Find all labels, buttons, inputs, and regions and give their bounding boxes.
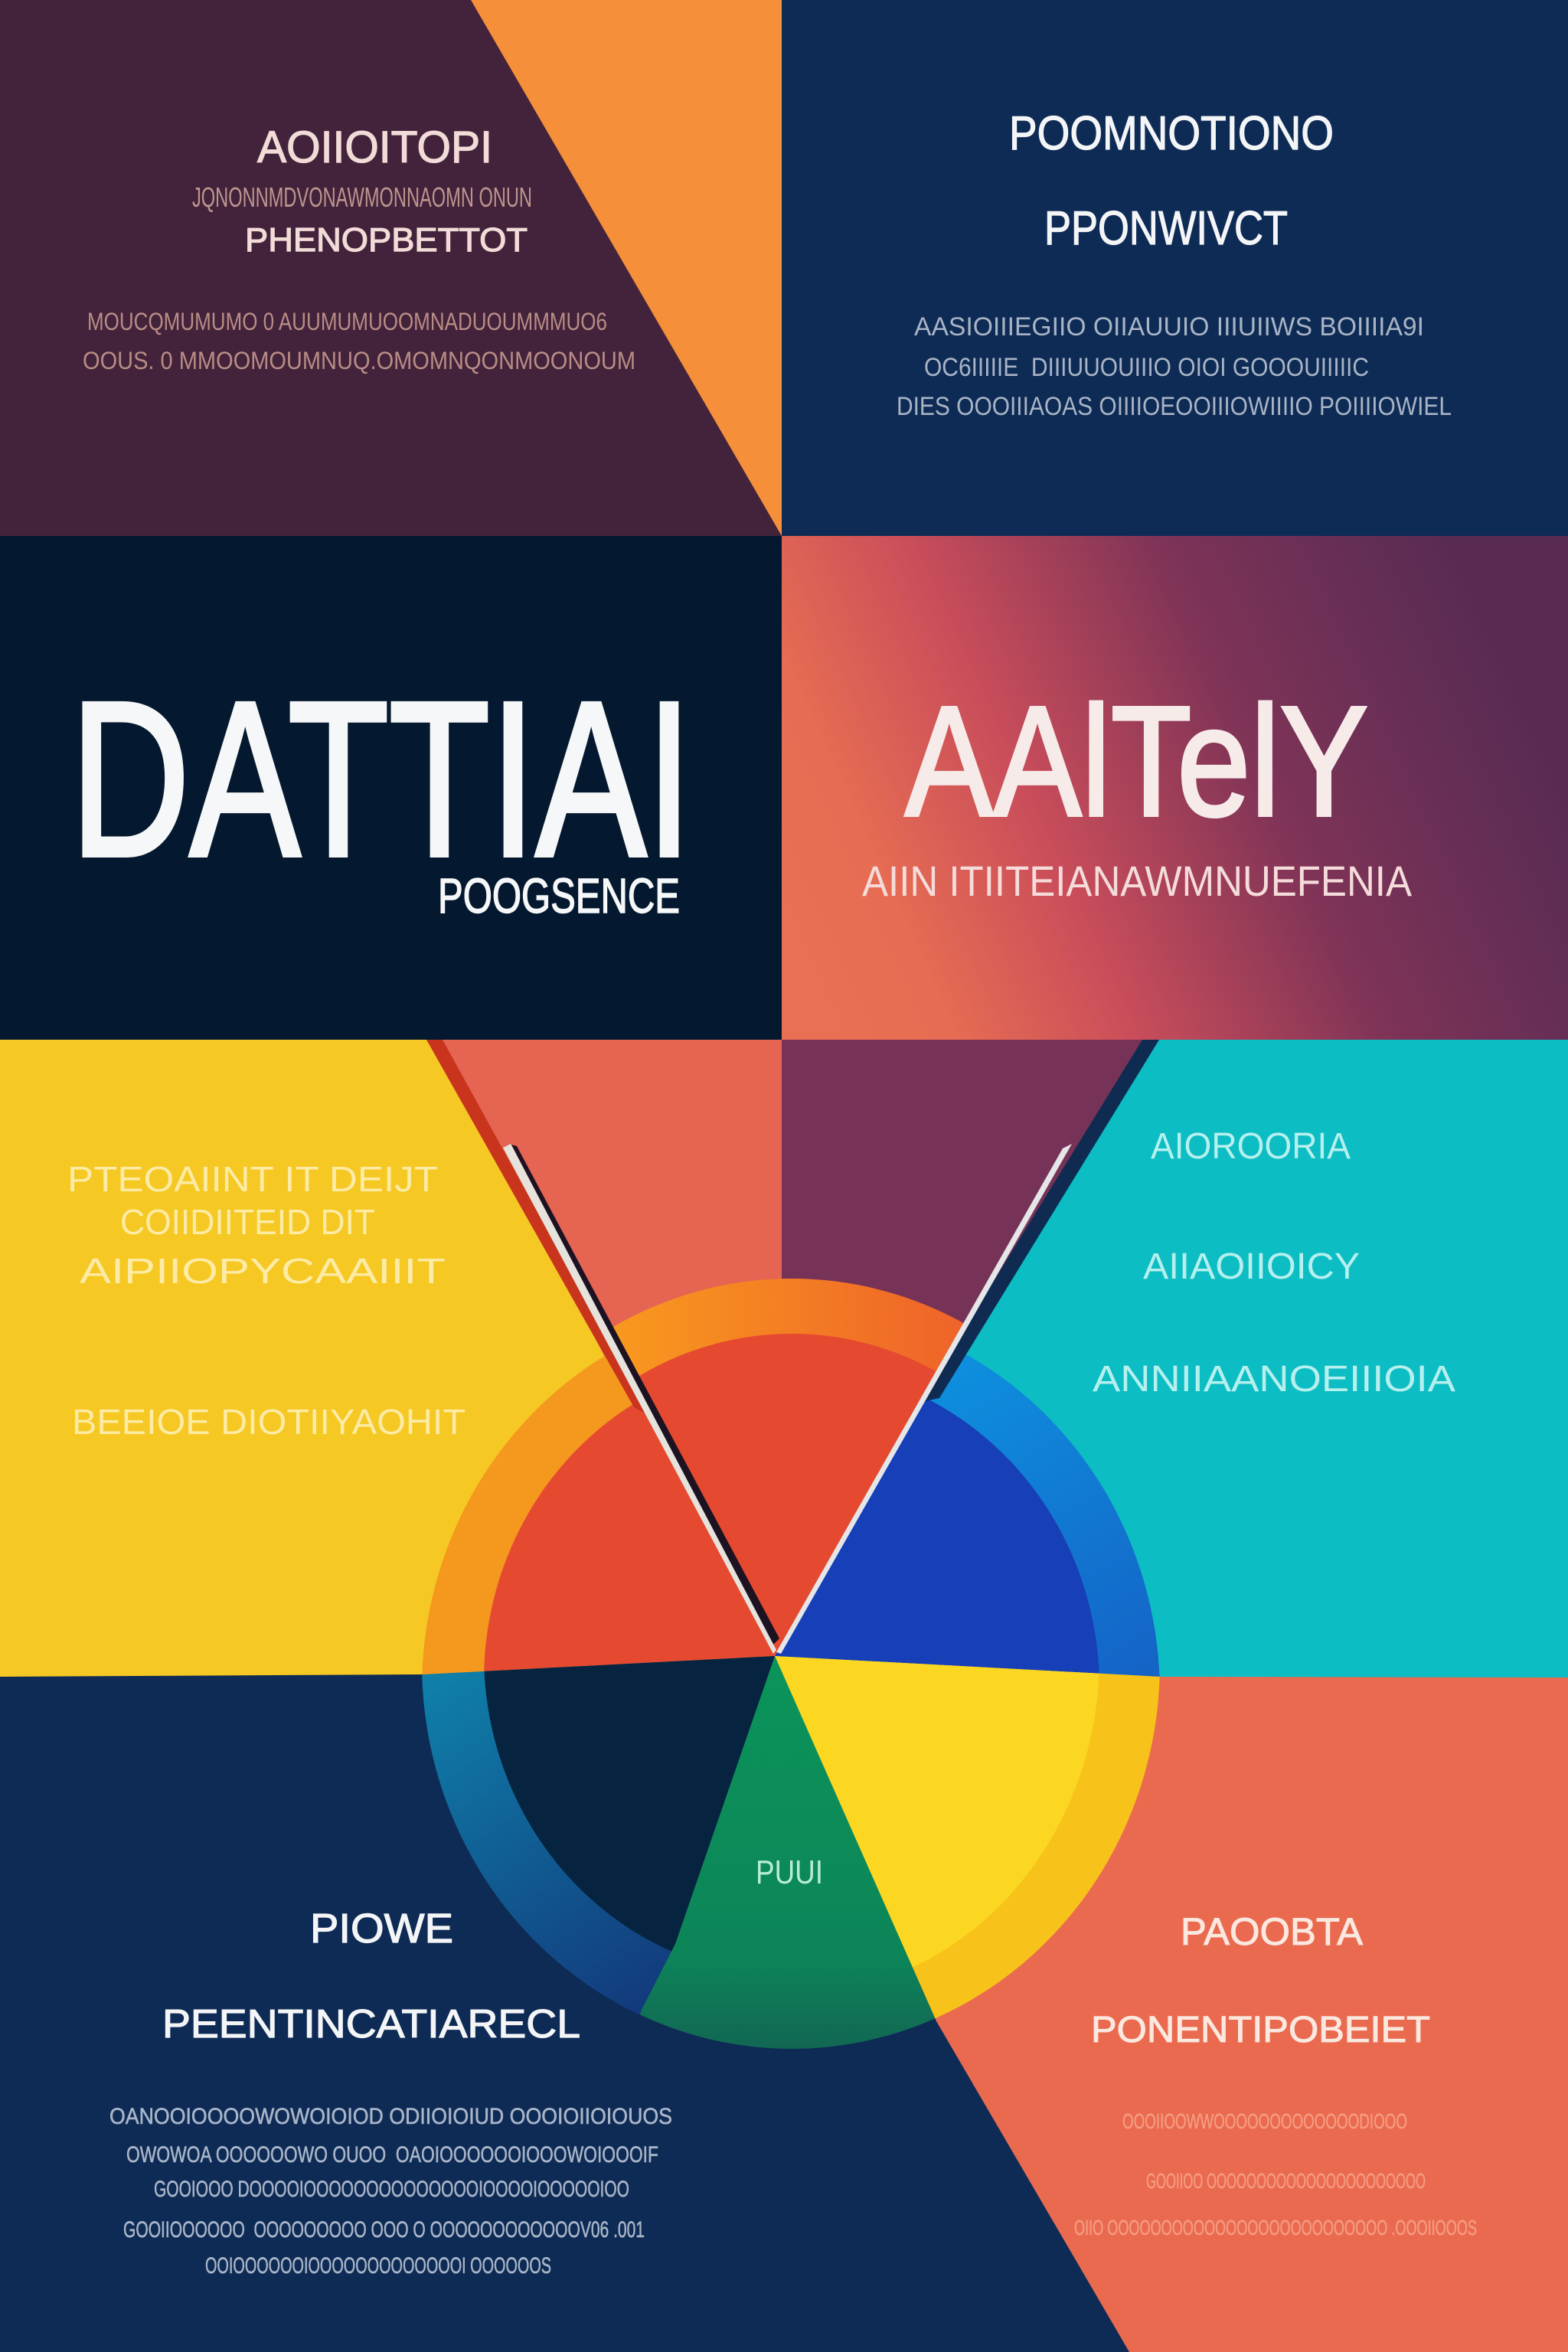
text: bottom left body: OANOOIOOOOWOWOIOIOD ODIIOIOIUD OOOIOIIOIOUOS [109,2104,672,2129]
panel: gradient hero [782,536,1568,1040]
text: teal panel: ANNIIAANOEIIIOIA [1093,1359,1455,1400]
heading: top left: AOIIOITOPI [257,122,492,172]
segment: dark navy [422,1656,775,2016]
heading: top right: PPONWIVCT [1044,202,1288,255]
text: top right body: OC6IIIIIE DIIIUUOUIIIO OIOI GOOOUIIIIIC [924,353,1369,382]
heading: top left: PHENOPBETTOT [245,221,528,259]
panel: bottom left navy [0,1656,1129,2352]
label: green segment: PUUI [756,1854,823,1891]
subtitle: POOGSENCE [438,868,680,923]
panel text: bottom left [109,1906,672,2278]
text: yellow panel: BEEIOE DIOTIIYAOHIT [72,1402,466,1442]
purple background wedge [782,1040,1148,1608]
coral background wedge [440,1040,782,1608]
panel: bottom right coral [775,1656,1568,2352]
panel: title dark navy [0,536,782,1040]
segment: top red [613,1279,963,1655]
text: yellow panel: AIPIIOPYCAAIIIT [80,1251,446,1291]
text: yellow panel: COIIDIITEID DIT [120,1202,375,1242]
orange diagonal wedge [471,0,782,536]
text: teal panel [1093,1126,1455,1400]
text: bottom left body: OOIOOOOOOIOOOOOOOOOOOOOI OOOOOOS [205,2253,551,2278]
panel: yellow left [0,1040,782,1677]
heading: bottom left: PEENTINCATIARECL [162,2002,580,2047]
segment: right blue [775,1354,1159,1677]
heading: top right [1009,107,1334,255]
heading: top right: POOMNOTIONO [1009,107,1334,160]
right pointer stripe [776,1040,1159,1654]
heading: bottom right: PAOOBTA [1181,1910,1364,1953]
text: bottom left body: GOOIIOOOOOO OOOOOOOOO OOO O OOOOOOOOOOOOV06 .001 [123,2217,645,2243]
panel text: bottom right [1074,1910,1477,2239]
text: bottom left body: GOOIOOO DOOOOIOOOOOOOOOOOOOOIOOOOIOOOOOIOO [154,2177,629,2202]
heading: bottom right [1091,1910,1430,2050]
text: bottom left body: OWOWOA OOOOOOWO OUOO OAOIOOOOOOIOOOWOIOOOIF [126,2142,658,2167]
panel: teal right [782,1040,1568,1677]
heading: bottom left [162,1906,580,2047]
segment: yellow [775,1656,1160,2018]
text: yellow panel: PTEOAIINT IT DEIJT [67,1159,438,1199]
hero subtitle: AIIN ITIITEIANAWMNUEFENIA [862,857,1413,905]
text: top left subheading: JQNONNMDVONAWMONNAOMN ONUN [192,181,532,213]
text: teal panel: AIOROORIA [1151,1126,1351,1167]
main title: DATTIAI [70,656,692,903]
hero title: AAlTelY [905,674,1368,849]
segment: left red [422,1356,775,1675]
text: teal panel: AIIAOIIOICY [1143,1246,1360,1287]
left pointer stripe [426,1040,779,1654]
text: top right body: AASIOIIIEGIIO OIIAUUIO IIIUIIWS BOIIIIA9I [914,312,1424,341]
heading: bottom right: PONENTIPOBEIET [1091,2010,1430,2050]
heading: bottom left: PIOWE [310,1906,453,1952]
text: bottom right body [1074,2109,1477,2239]
text: top left body [83,308,635,374]
text: top right body [897,312,1452,421]
text: top left body: MOUCQMUMUMO 0 AUUMUMUOOMNADUOUMMMUO6 [87,308,607,335]
text: top left body: OOUS. 0 MMOOMOUMNUQ.OMOMNQONMOONOUM [83,347,635,374]
text: bottom right body: OOOIIOOWWOOOOOOOOOOOOODIOOO [1122,2109,1407,2133]
heading: top left [245,122,528,259]
panel: top right navy [782,0,1568,536]
text: bottom left body [109,2104,672,2278]
text: yellow panel [67,1159,466,1442]
panel: top left plum [0,0,782,536]
pie chart [422,1279,1161,2079]
text: top right body: DIES OOOIIIAOAS OIIIIOEOOIIIOWIIIIO POIIIIOWIEL [897,392,1452,421]
segment: green [640,1656,936,2049]
